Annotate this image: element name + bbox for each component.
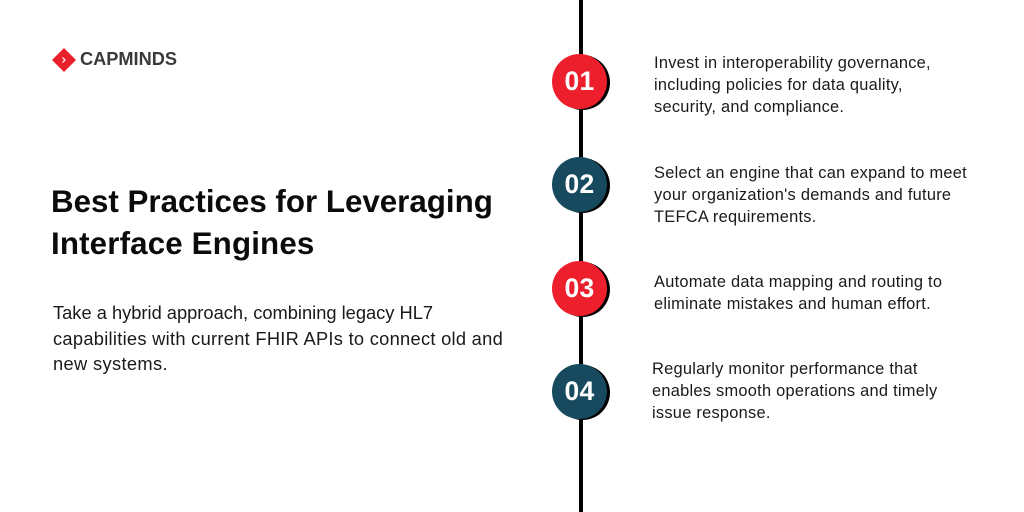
step 02 badge xyxy=(552,157,607,212)
title: Interface Engines xyxy=(51,226,314,261)
step 03 text: eliminate mistakes and human effort. xyxy=(654,295,931,313)
step 01 text xyxy=(654,54,931,116)
intro text: Take a hybrid approach, combining legacy HL7 xyxy=(53,302,433,323)
step 01 text: including policies for data quality, xyxy=(654,76,903,94)
logo xyxy=(52,48,177,72)
intro text xyxy=(53,302,503,374)
icon: red diamond xyxy=(52,48,76,72)
step 03 badge: 03 xyxy=(564,273,595,303)
step 02 text: your organization's demands and future xyxy=(654,186,951,204)
step 01 badge xyxy=(552,54,607,109)
step 03 text: Automate data mapping and routing to xyxy=(654,273,942,291)
logo wordmark: CAPMINDS xyxy=(80,49,177,69)
step 01 badge: 01 xyxy=(564,66,595,96)
step 04 text: Regularly monitor performance that xyxy=(652,360,918,378)
step 03 badge xyxy=(552,261,607,316)
step 01 text: Invest in interoperability governance, xyxy=(654,54,931,72)
step 04 badge: 04 xyxy=(564,376,595,406)
title xyxy=(51,184,493,261)
step 02 text: TEFCA requirements. xyxy=(654,208,817,226)
step 01 text: security, and compliance. xyxy=(654,98,844,116)
timeline line xyxy=(579,0,583,512)
step 02 badge: 02 xyxy=(564,169,595,199)
step 02 text xyxy=(654,164,967,226)
step 02 text: Select an engine that can expand to meet xyxy=(654,164,967,182)
step 04 badge xyxy=(552,364,607,419)
step 03 text xyxy=(654,273,942,313)
title: Best Practices for Leveraging xyxy=(51,184,493,219)
step 04 text xyxy=(652,360,938,422)
step 04 text: enables smooth operations and timely xyxy=(652,382,937,400)
intro text: capabilities with current FHIR APIs to connect old and xyxy=(53,328,503,348)
intro text: new systems. xyxy=(53,353,168,374)
step 04 text: issue response. xyxy=(652,404,771,422)
